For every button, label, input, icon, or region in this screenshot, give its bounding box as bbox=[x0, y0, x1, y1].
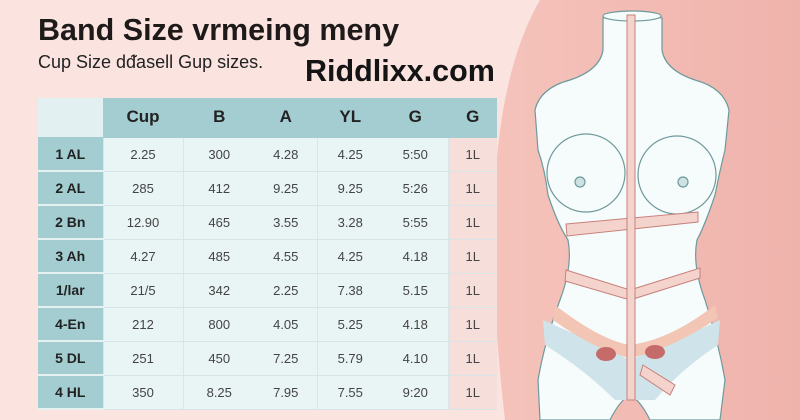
table: 21/5 bbox=[130, 282, 156, 298]
table: 285 bbox=[132, 180, 154, 196]
table: 1L bbox=[466, 316, 480, 332]
subtitle: Cup Size dᵭasell Gup sizes. bbox=[38, 52, 263, 72]
table: 9.25 bbox=[273, 180, 298, 196]
table: 1L bbox=[466, 180, 480, 196]
table: 4.18 bbox=[403, 248, 428, 264]
table: G bbox=[466, 107, 479, 126]
table: 12.90 bbox=[127, 214, 159, 230]
tapes bbox=[553, 15, 718, 400]
table: 2.25 bbox=[130, 146, 156, 162]
table: A bbox=[280, 107, 292, 126]
table: 300 bbox=[208, 146, 230, 162]
table: 5.15 bbox=[403, 282, 428, 298]
table: 9:20 bbox=[403, 384, 428, 400]
table: 212 bbox=[132, 316, 154, 332]
table: 412 bbox=[208, 180, 230, 196]
briefs bbox=[543, 320, 720, 400]
table: 8.25 bbox=[207, 384, 232, 400]
table: 2 AL bbox=[55, 180, 85, 196]
table: 1L bbox=[466, 282, 480, 298]
table: 5.79 bbox=[338, 350, 363, 366]
table: 3.55 bbox=[273, 214, 298, 230]
table: 4.27 bbox=[130, 248, 156, 264]
table: YL bbox=[339, 107, 361, 126]
brand: Riddlixx.com bbox=[305, 54, 495, 88]
table: 4.10 bbox=[403, 350, 428, 366]
table: 4.25 bbox=[338, 248, 363, 264]
table: 1L bbox=[466, 146, 480, 162]
table: 4.05 bbox=[273, 316, 298, 332]
table: 1/lar bbox=[56, 282, 85, 298]
table: 7.55 bbox=[338, 384, 363, 400]
table: 4-En bbox=[55, 316, 85, 332]
table: 5:26 bbox=[403, 180, 428, 196]
table: 3.28 bbox=[338, 214, 363, 230]
table: 450 bbox=[208, 350, 230, 366]
table: 4.28 bbox=[273, 146, 298, 162]
table: 9.25 bbox=[338, 180, 363, 196]
torso bbox=[535, 14, 729, 420]
table: 5:50 bbox=[403, 146, 428, 162]
table: 800 bbox=[208, 316, 230, 332]
table: 2.25 bbox=[273, 282, 298, 298]
table: 2 Bn bbox=[55, 214, 85, 230]
table: 4 HL bbox=[55, 384, 85, 400]
table: 4.18 bbox=[403, 316, 428, 332]
table: 4.55 bbox=[273, 248, 298, 264]
table: 7.25 bbox=[273, 350, 298, 366]
table: 7.38 bbox=[338, 282, 363, 298]
table: 5:55 bbox=[403, 214, 428, 230]
table: 251 bbox=[132, 350, 154, 366]
table: 1L bbox=[466, 248, 480, 264]
table: 1L bbox=[466, 384, 480, 400]
table: 7.95 bbox=[273, 384, 298, 400]
table: B bbox=[213, 107, 225, 126]
table: 485 bbox=[208, 248, 230, 264]
table: 4.25 bbox=[338, 146, 363, 162]
table: 1L bbox=[466, 350, 480, 366]
table: 1L bbox=[466, 214, 480, 230]
table bbox=[38, 98, 497, 410]
table: Cup bbox=[126, 107, 160, 126]
table: 1 AL bbox=[55, 146, 85, 162]
title: Band Size vrmeing meny bbox=[38, 13, 399, 47]
table: G bbox=[409, 107, 422, 126]
table: 5 DL bbox=[55, 350, 85, 366]
table: 465 bbox=[208, 214, 230, 230]
table: 3 Ah bbox=[55, 248, 85, 264]
table: 350 bbox=[132, 384, 154, 400]
table: 5.25 bbox=[338, 316, 363, 332]
table: 342 bbox=[208, 282, 230, 298]
